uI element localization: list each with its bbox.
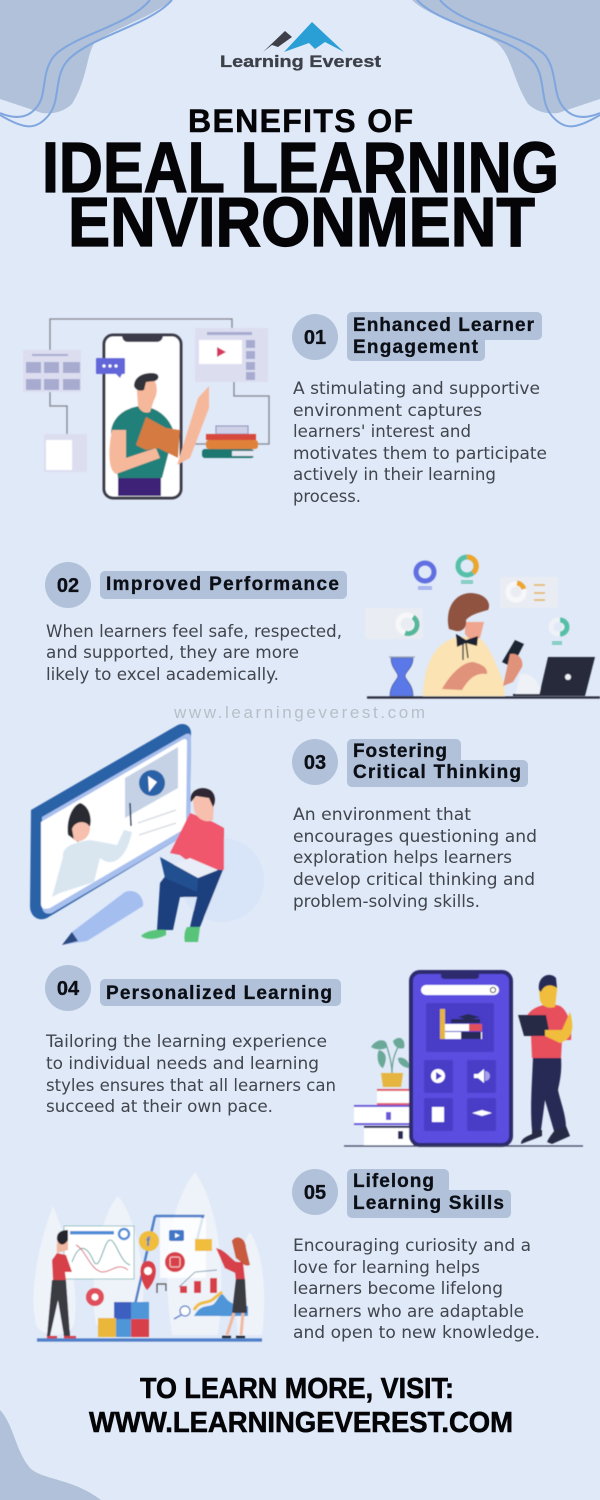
heading: Engagement bbox=[353, 337, 479, 358]
body text bbox=[46, 622, 342, 684]
body text: An environment that bbox=[293, 805, 472, 824]
body text: develop critical thinking and bbox=[293, 870, 535, 889]
body text: exploration helps learners bbox=[293, 848, 512, 867]
heading: Improved Performance bbox=[106, 574, 339, 595]
logo bbox=[220, 22, 381, 71]
heading bbox=[347, 739, 528, 787]
heading: Enhanced Learner bbox=[353, 315, 535, 336]
title: BENEFITS OF bbox=[188, 103, 413, 139]
badge 04: 04 bbox=[57, 978, 80, 1000]
body text: succeed at their own pace. bbox=[46, 1097, 273, 1116]
badge 01 bbox=[292, 314, 338, 360]
call to action: WWW.LEARNINGEVEREST.COM bbox=[89, 1407, 513, 1439]
panel: 02 Improved Performance bbox=[45, 562, 347, 684]
body text bbox=[45, 1032, 336, 1116]
badge 05: 05 bbox=[304, 1182, 326, 1204]
title bbox=[42, 103, 559, 261]
illustration: phone teacher with book bbox=[23, 319, 269, 498]
illustration: digital media team bbox=[33, 1172, 264, 1340]
heading: Lifelong bbox=[353, 1171, 434, 1192]
icon: mountains bbox=[263, 22, 344, 52]
heading: Learning Skills bbox=[353, 1193, 504, 1214]
illustration: digital media team: f bbox=[146, 1234, 151, 1249]
body text: and supported, they are more bbox=[46, 643, 299, 662]
badge 02 bbox=[45, 562, 91, 608]
illustration: online video lesson bbox=[30, 724, 264, 945]
body text bbox=[293, 379, 547, 506]
badge 04 bbox=[45, 965, 91, 1011]
badge 05 bbox=[292, 1169, 338, 1215]
body text bbox=[293, 1236, 540, 1342]
body text: process. bbox=[293, 487, 361, 506]
heading: Critical Thinking bbox=[353, 762, 521, 783]
body text: learners' interest and bbox=[293, 422, 471, 441]
corner decoration: bottom left bbox=[0, 1410, 101, 1500]
body text: motivates them to participate bbox=[293, 444, 547, 463]
badge 03: 03 bbox=[304, 752, 326, 774]
body text: to individual needs and learning bbox=[46, 1054, 319, 1073]
body text: love for learning helps bbox=[293, 1258, 480, 1277]
body text: Encouraging curiosity and a bbox=[293, 1236, 531, 1255]
body text: Tailoring the learning experience bbox=[45, 1032, 327, 1051]
panel: 04 Personalized Learning bbox=[45, 965, 341, 1116]
body text: learners who are adaptable bbox=[293, 1302, 524, 1321]
heading bbox=[347, 1169, 511, 1218]
panel: 05 Lifelong Learning Skills bbox=[292, 1169, 540, 1342]
body text bbox=[293, 805, 537, 911]
badge 02: 02 bbox=[57, 575, 79, 597]
call to action bbox=[89, 1373, 513, 1439]
body text: encourages questioning and bbox=[293, 827, 537, 846]
body text: actively in their learning bbox=[293, 465, 496, 484]
illustration: woman with phone and charts bbox=[365, 557, 600, 698]
body text: and open to new knowledge. bbox=[293, 1323, 540, 1342]
watermark: www.learningeverest.com bbox=[173, 703, 425, 722]
badge 03 bbox=[292, 739, 338, 785]
logo wordmark: Learning Everest bbox=[220, 52, 381, 71]
body text: When learners feel safe, respected, bbox=[46, 622, 342, 641]
illustration: learning app on phone bbox=[344, 972, 583, 1146]
body text: likely to excel academically. bbox=[46, 665, 279, 684]
panel: 03 Fostering Critical Thinking bbox=[292, 739, 537, 911]
title: ENVIRONMENT bbox=[68, 183, 535, 261]
corner decoration: top right bbox=[412, 0, 600, 126]
body text: A stimulating and supportive bbox=[293, 379, 540, 398]
heading bbox=[347, 312, 542, 361]
body text: environment captures bbox=[293, 401, 482, 420]
body text: styles ensures that all learners can bbox=[46, 1076, 336, 1095]
body text: problem-solving skills. bbox=[293, 892, 480, 911]
corner decoration: top left bbox=[0, 0, 172, 126]
body text: learners become lifelong bbox=[293, 1279, 503, 1298]
heading: Personalized Learning bbox=[106, 983, 332, 1004]
call to action: TO LEARN MORE, VISIT: bbox=[140, 1373, 454, 1405]
panel: 01 Enhanced Learner Engagement bbox=[292, 312, 547, 506]
heading: Fostering bbox=[353, 741, 447, 762]
badge 01: 01 bbox=[304, 327, 326, 349]
